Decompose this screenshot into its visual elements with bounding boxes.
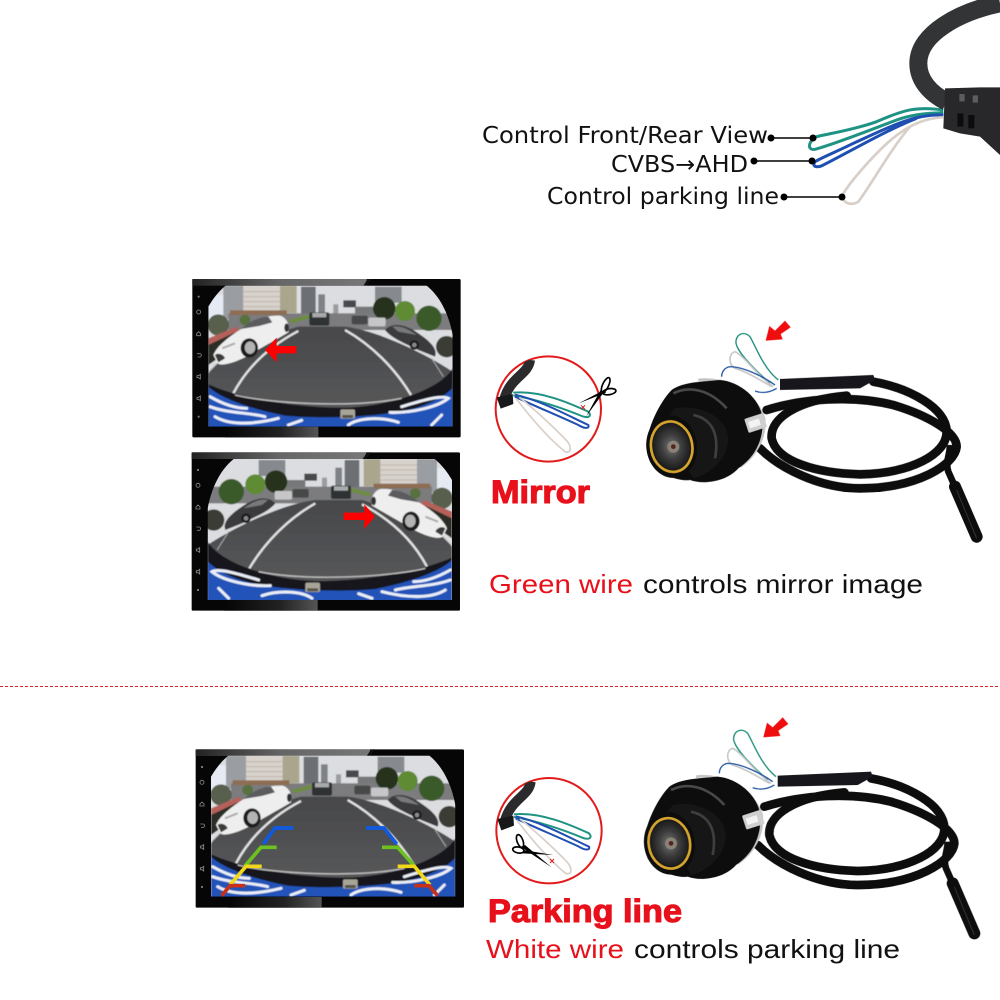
arrow: white wire bbox=[763, 717, 788, 737]
section divider bbox=[0, 686, 1000, 688]
mirror wire inset bbox=[496, 356, 616, 462]
arrow: right bbox=[344, 504, 375, 529]
top cable with wire loops bbox=[809, 3, 1000, 204]
parking guide lines bbox=[222, 828, 438, 896]
label: control parking line: Control parking line bbox=[547, 184, 779, 210]
icon: scissors bbox=[579, 376, 616, 417]
screen: mirrored view bbox=[192, 452, 460, 611]
label: CVBS to AHD bbox=[611, 152, 816, 178]
mirror caption: Green wire bbox=[489, 569, 633, 599]
screen: original view bbox=[192, 279, 461, 437]
arrow: green wire bbox=[766, 321, 791, 341]
parking caption: White wire bbox=[486, 934, 624, 964]
icon: scissors bbox=[512, 834, 553, 867]
arrow: left bbox=[265, 338, 296, 362]
mirror caption bbox=[489, 569, 923, 599]
cable and strain relief bbox=[918, 3, 1000, 155]
mirror heading: Mirror bbox=[491, 474, 590, 510]
parking caption: controls parking line bbox=[634, 934, 900, 964]
parking caption bbox=[486, 934, 900, 964]
screen: parking line view bbox=[196, 749, 464, 908]
parking line heading: Parking line bbox=[488, 893, 682, 929]
mirror caption: controls mirror image bbox=[643, 569, 923, 599]
camera: parking section bbox=[640, 717, 974, 935]
parking wire inset bbox=[496, 778, 602, 883]
label: CVBS to AHD: CVBS→AHD bbox=[611, 152, 748, 178]
wire callouts bbox=[482, 123, 846, 210]
label: control front/rear view: Control Front/Rear View bbox=[482, 123, 768, 149]
camera: mirror section bbox=[642, 321, 977, 538]
